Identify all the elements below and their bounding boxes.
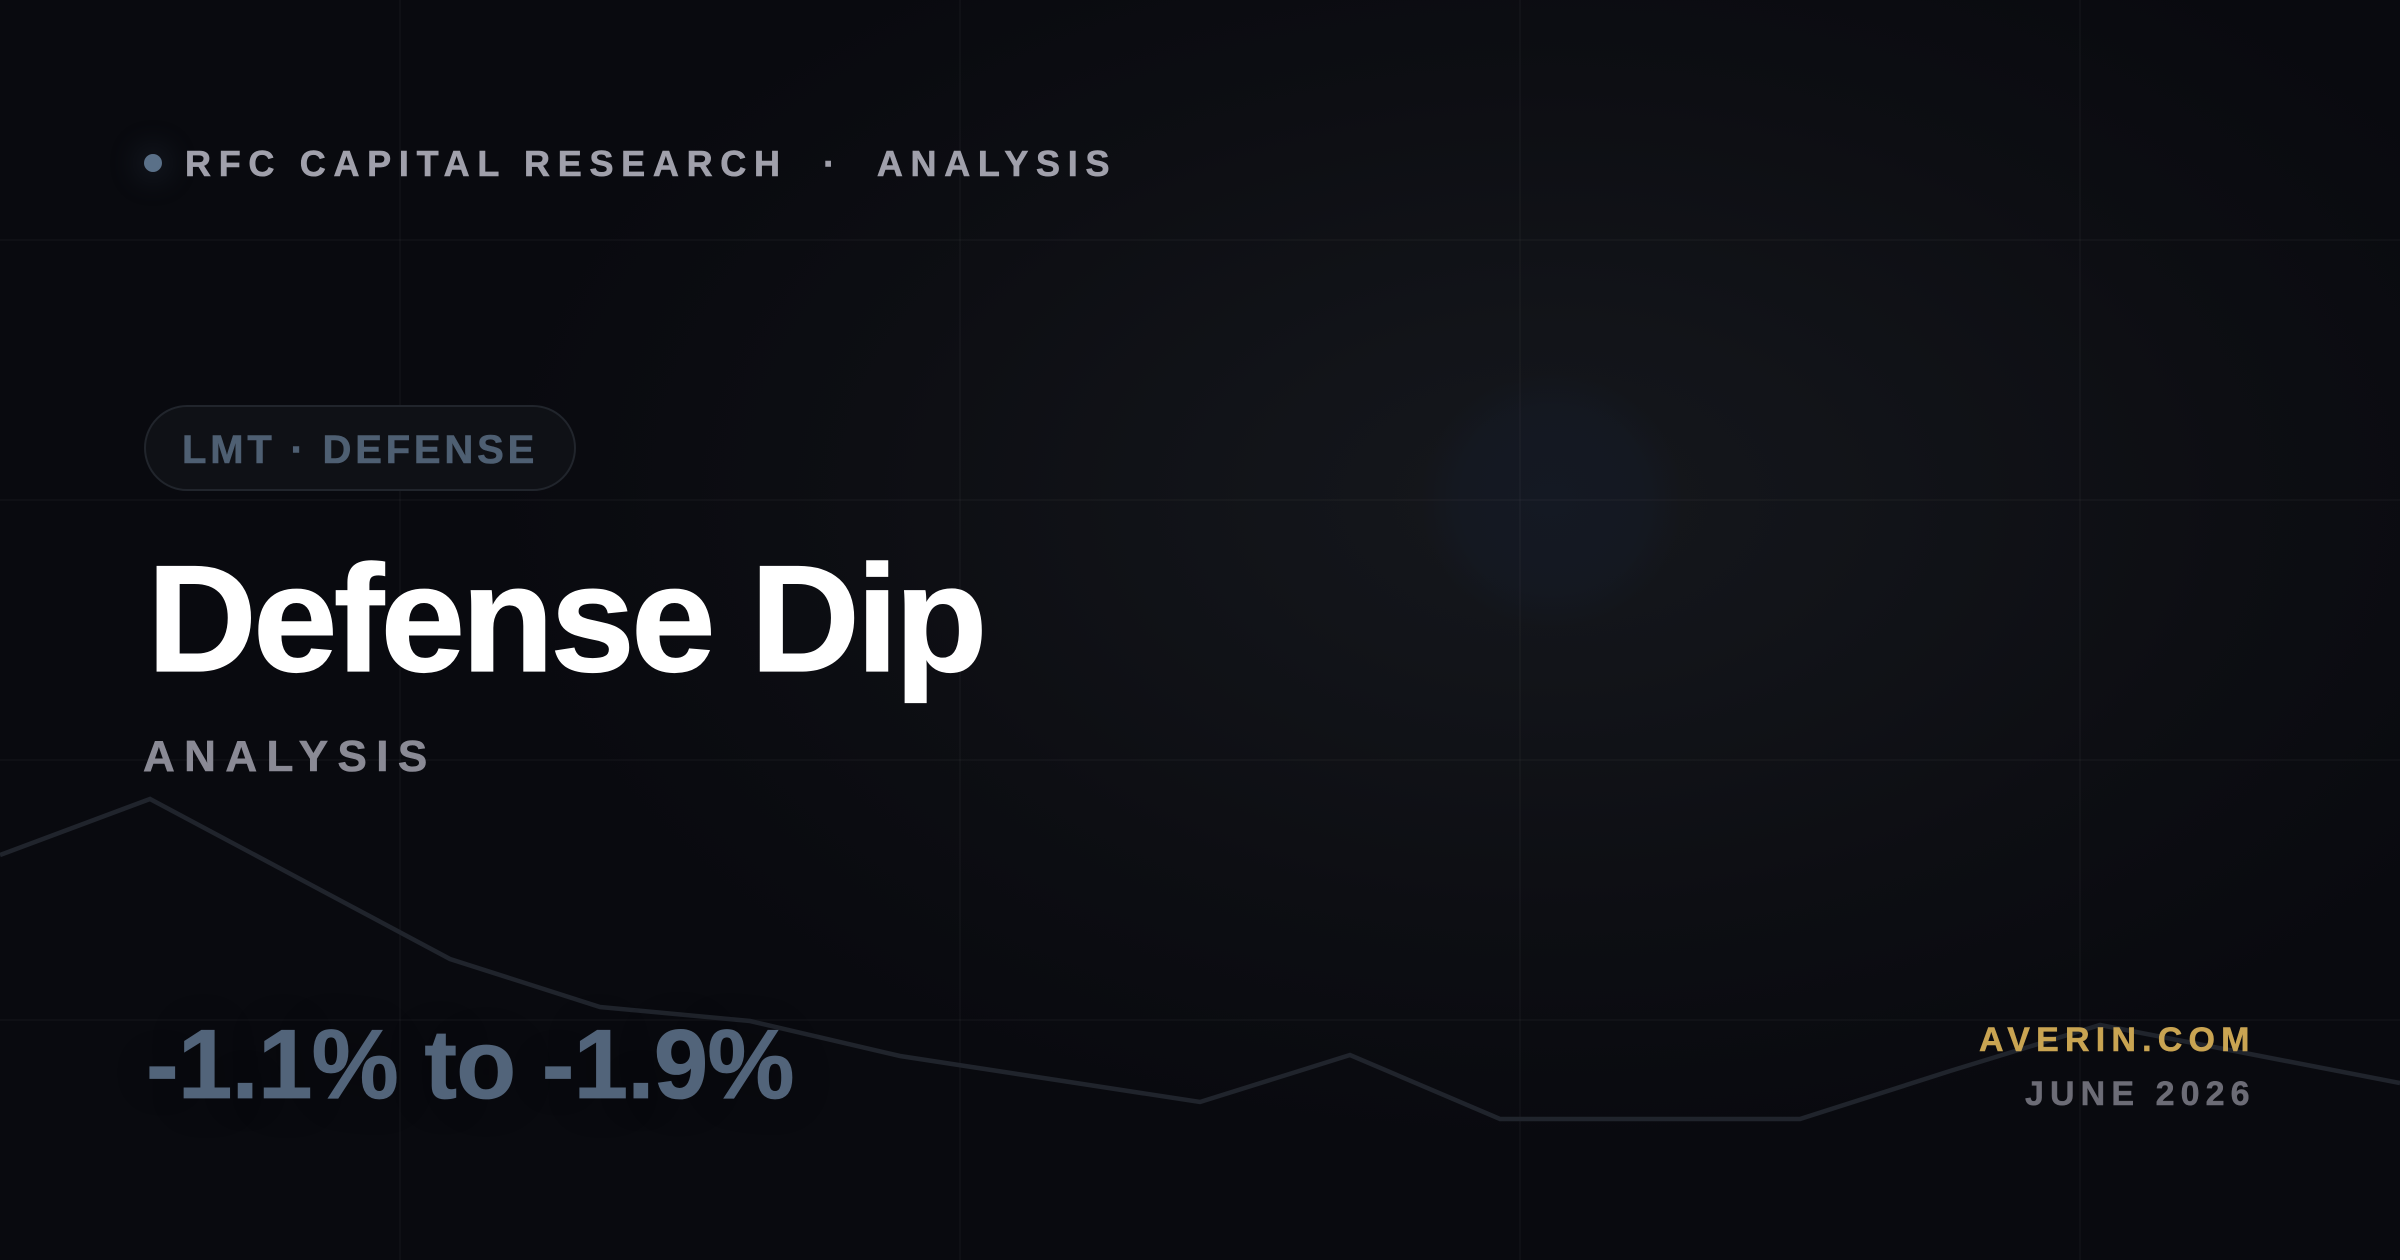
status dot icon xyxy=(144,154,162,172)
date: JUNE 2026 xyxy=(2025,1075,2256,1113)
site name: AVERIN.COM xyxy=(1979,1021,2256,1059)
key statistic range: -1.1% to -1.9% xyxy=(146,1009,794,1119)
eyebrow: publisher and category: RFC CAPITAL RESEARCH · ANALYSIS xyxy=(185,143,1117,184)
ticker label: LMT · DEFENSE xyxy=(182,428,538,472)
subtitle: ANALYSIS xyxy=(143,732,437,781)
ticker pill xyxy=(144,405,576,491)
title: Defense Dip xyxy=(147,534,984,704)
